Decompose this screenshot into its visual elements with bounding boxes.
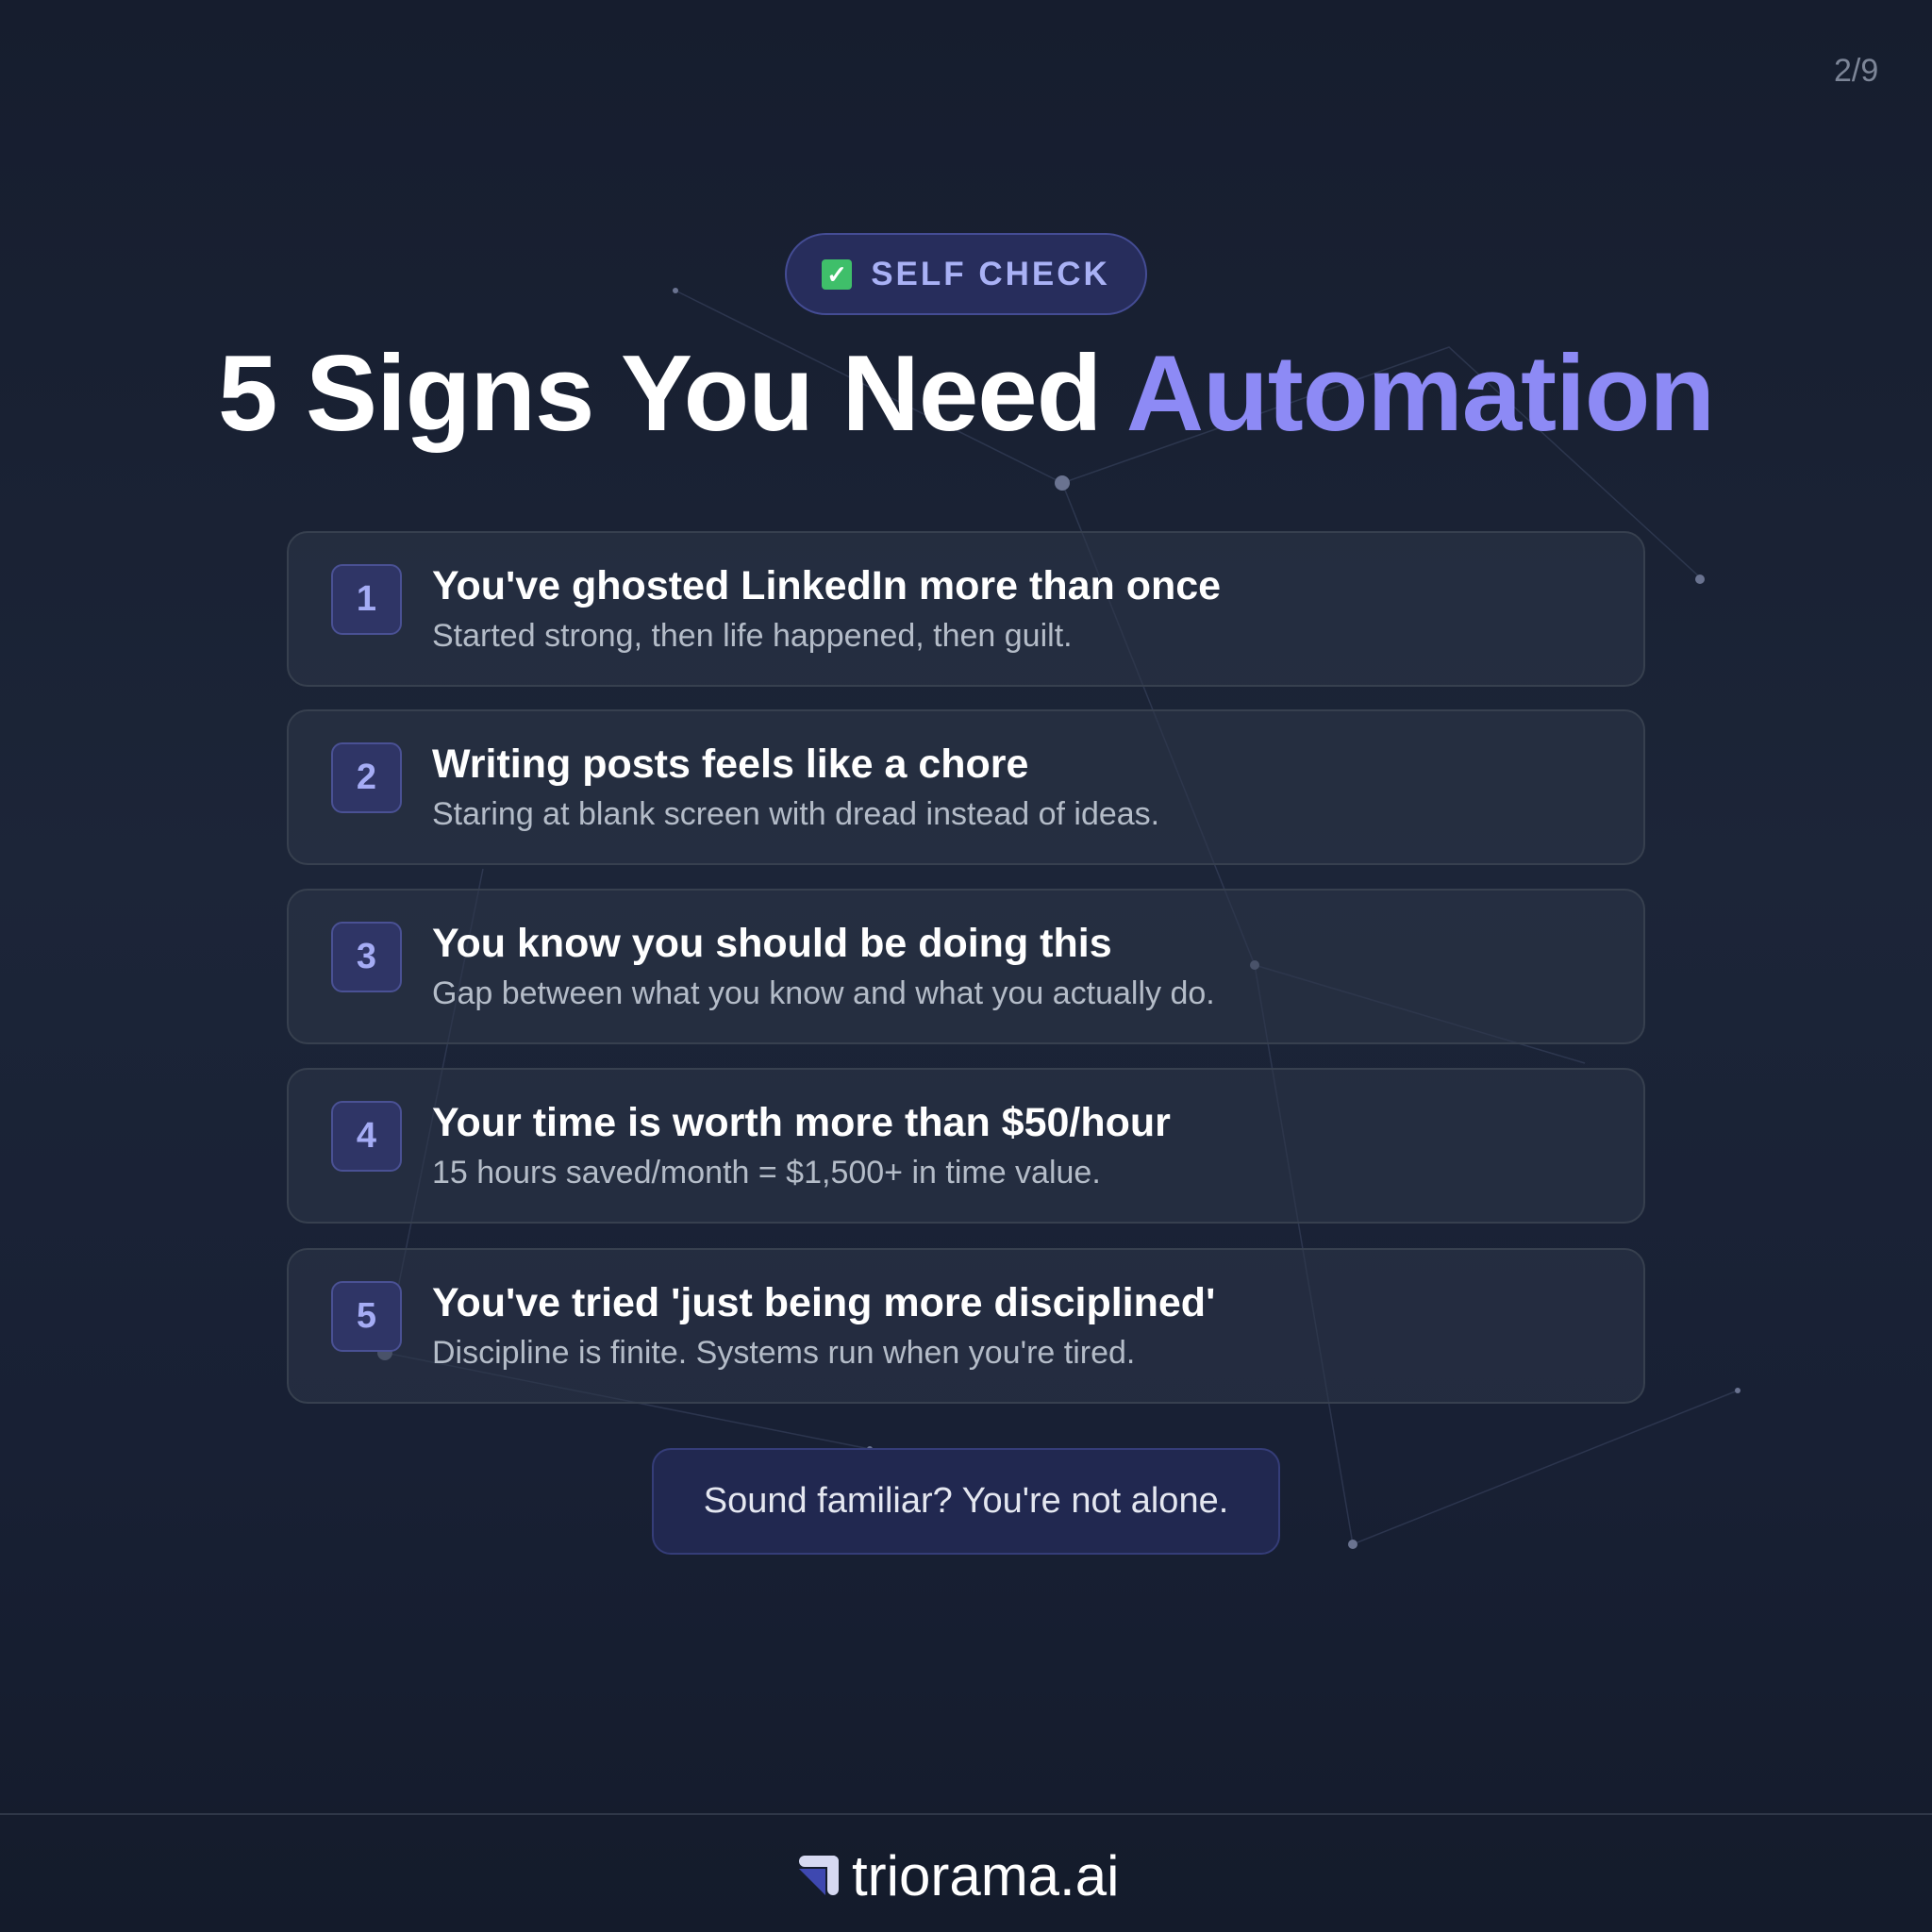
card 1: You've ghosted LinkedIn more than once [432,563,1221,608]
card 4: Your time is worth more than $50/hour [432,1100,1171,1145]
card 2: Writing posts feels like a chore [432,741,1028,787]
card 2: Staring at blank screen with dread instead of ideas. [432,796,1159,832]
card 5 [287,1248,1645,1404]
page number: 2/9 [1834,53,1878,89]
icon: check: ✓ [826,260,847,289]
card 1: Started strong, then life happened, then guilt. [432,618,1073,654]
card 2: 2 [357,758,376,797]
card 3: Gap between what you know and what you actually do. [432,975,1215,1011]
icon: logo [799,1856,839,1895]
icon: check [822,258,852,289]
card 5: Discipline is finite. Systems run when you're tired. [432,1335,1135,1371]
card 4 [287,1068,1645,1224]
card 3 [287,889,1645,1044]
footer logo: triorama.ai [852,1843,1119,1907]
badge: self check [785,233,1147,315]
callout: Sound familiar? You're not alone. [704,1481,1228,1521]
card 5: You've tried 'just being more disciplined' [432,1280,1215,1325]
card 3: 3 [357,937,376,976]
card 3: You know you should be doing this [432,921,1112,966]
title: 5 Signs You Need Automation [218,334,1714,454]
card 5: 5 [357,1296,376,1336]
card 1: 1 [357,579,376,619]
card 2 [287,709,1645,865]
callout [652,1448,1280,1555]
card 4: 15 hours saved/month = $1,500+ in time value. [432,1155,1101,1191]
card 4: 4 [357,1116,376,1156]
card 1 [287,531,1645,687]
badge: self check: SELF CHECK [871,255,1110,292]
